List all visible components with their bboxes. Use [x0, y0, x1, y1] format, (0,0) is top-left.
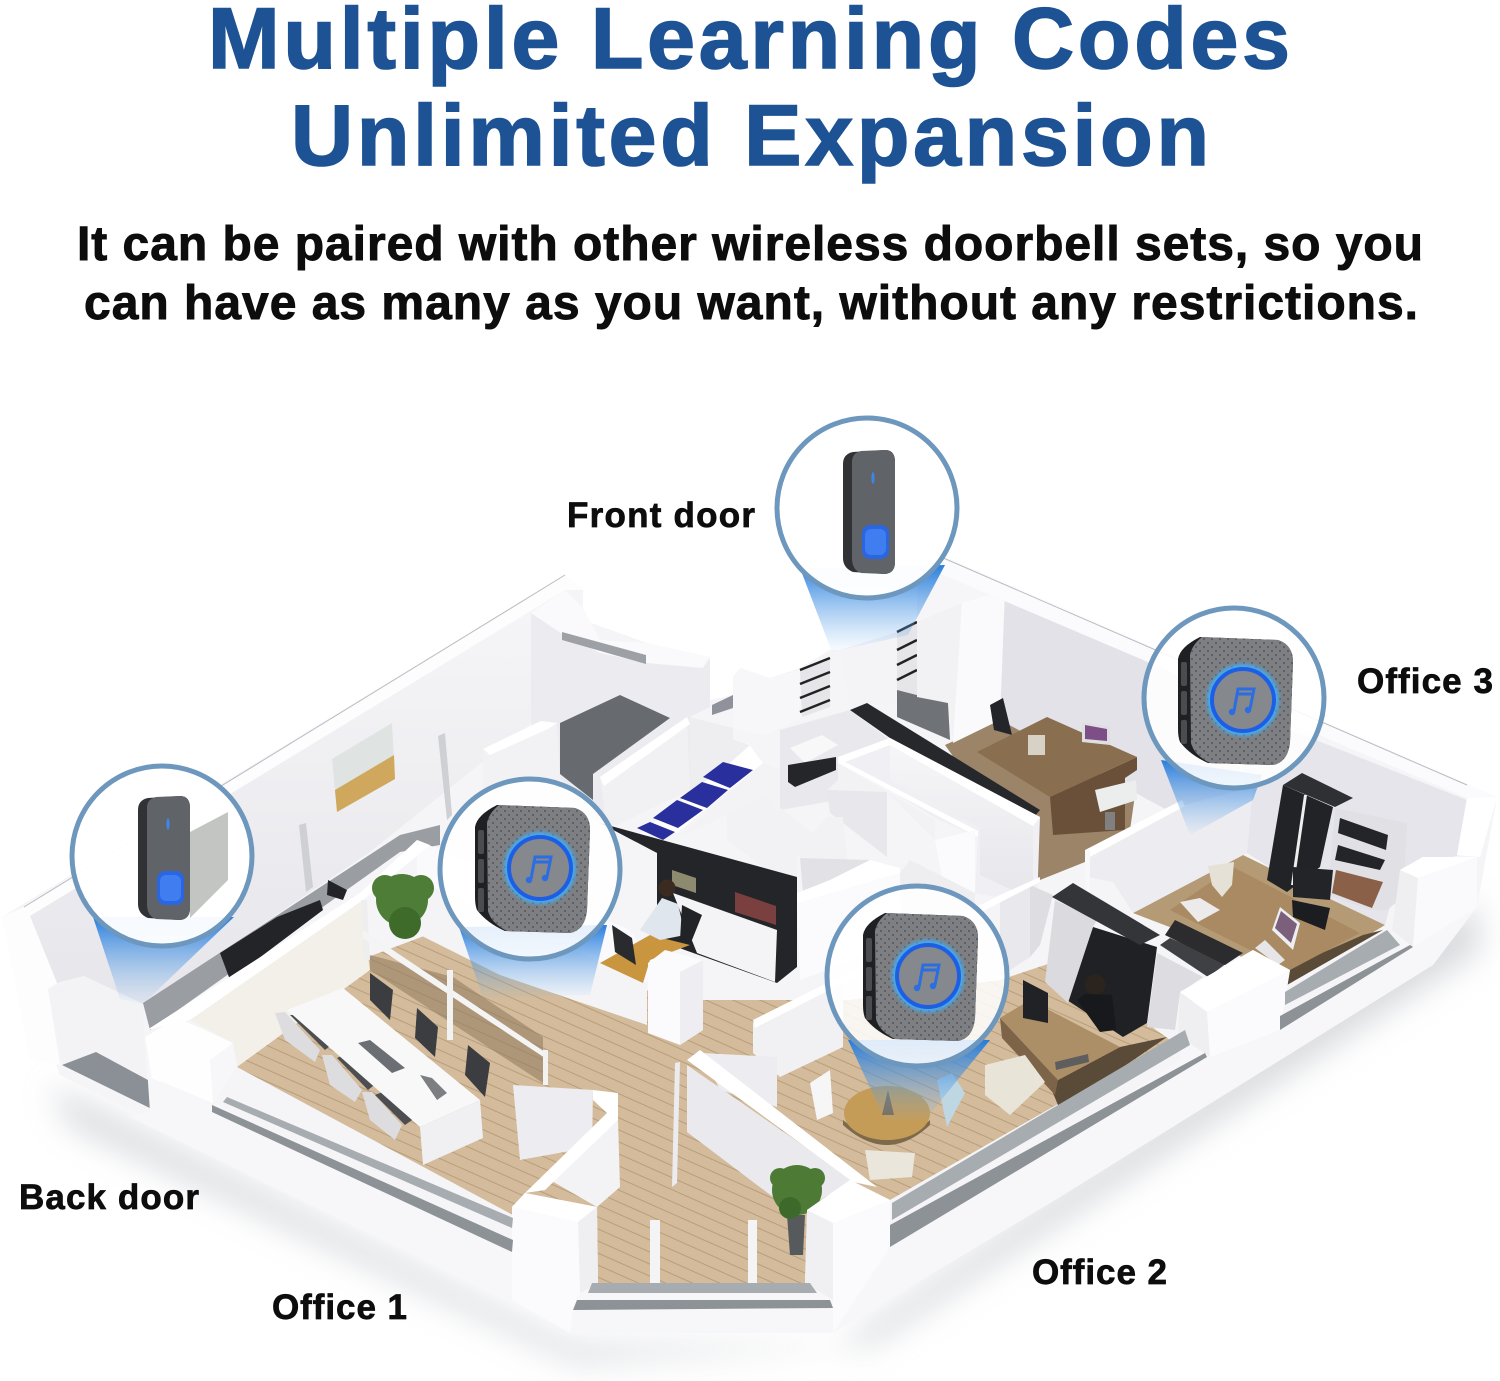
- ground shadow: [50, 900, 1480, 1362]
- sink and middle walls: [637, 710, 890, 836]
- callout: back door button: [72, 766, 252, 946]
- callout: office 2 chime: [827, 886, 1007, 1066]
- subtitle text: can have as many as you want, without any restrictions.: [84, 277, 1418, 330]
- office 3 furniture: [1165, 773, 1407, 985]
- label: Office 3: Office 3: [1357, 662, 1493, 701]
- black band wall: [850, 703, 1040, 818]
- office 3 back wall: [1240, 710, 1467, 925]
- label: Office 2: Office 2: [1032, 1253, 1167, 1292]
- subtitle text: [77, 218, 1423, 330]
- beam: office 2: [848, 1040, 990, 1120]
- top right room back wall: [1000, 590, 1247, 853]
- label: Front door: Front door: [567, 496, 755, 535]
- wall picture: [332, 723, 395, 812]
- reception counter: [400, 840, 703, 1045]
- outer front wall: [130, 797, 1497, 1333]
- meeting table and chairs: [275, 973, 490, 1165]
- corridor floor and shelves: [143, 825, 440, 1030]
- floor plan illustration: [2, 545, 1497, 1362]
- window strips: [212, 930, 1413, 1310]
- callout: front door button: [777, 418, 957, 598]
- beam: reception: [459, 925, 607, 998]
- wall doors: [299, 733, 452, 892]
- partition wall to office 3: [1088, 787, 1253, 913]
- glass railing: [361, 900, 548, 1085]
- long left wall: [24, 590, 583, 1004]
- dining table and chairs: [810, 1070, 965, 1180]
- office 2 side wall: [753, 979, 843, 1077]
- label: Back door: Back door: [19, 1178, 199, 1217]
- tower walls and windows at back: [733, 668, 802, 735]
- middle room walls: [727, 738, 1040, 980]
- back door area: [48, 976, 146, 1080]
- title: Unlimited Expansion: [291, 88, 1209, 184]
- callout: reception chime: [440, 779, 620, 959]
- beam: office 3: [1161, 760, 1262, 835]
- subtitle text: It can be paired with other wireless doorbell sets, so you: [77, 218, 1423, 271]
- office 2 furniture: [985, 882, 1227, 1115]
- callout: office 3 chime: [1144, 608, 1324, 788]
- title: [208, 0, 1290, 184]
- receptionist: [640, 880, 702, 945]
- office desk top right: [977, 698, 1137, 835]
- hall posts: [650, 1220, 757, 1297]
- hall diagonal wall: [672, 1050, 877, 1208]
- label: Office 1: Office 1: [272, 1288, 407, 1327]
- office 1 back wall: [190, 900, 370, 1067]
- beam: front door: [800, 565, 945, 652]
- outer back wall rim: [918, 545, 1497, 857]
- black cabinet: [600, 823, 797, 983]
- plant: hall: [770, 1165, 825, 1255]
- plant: office 1: [372, 874, 434, 939]
- wooden floors: [237, 720, 1385, 1290]
- blue mats: [637, 762, 753, 840]
- beam: back door: [93, 917, 234, 1004]
- building base: [2, 545, 1497, 1333]
- back room and stairs: [531, 613, 710, 830]
- corridor partition with door: [513, 1085, 620, 1207]
